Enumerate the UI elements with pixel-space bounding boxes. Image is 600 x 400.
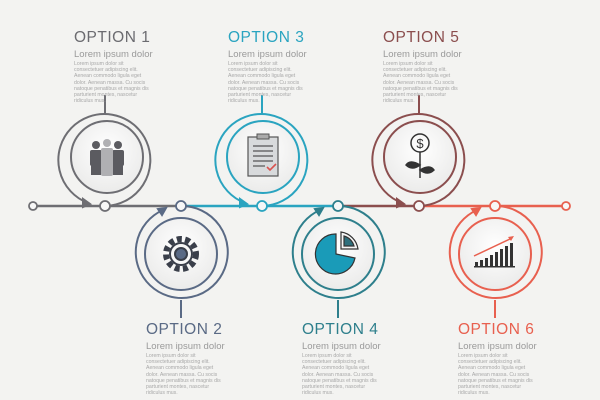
- icon: pie chart: [315, 232, 358, 274]
- text: option 5: Lorem ipsum dolor: [383, 49, 462, 60]
- circle 4: [293, 206, 385, 318]
- circle 3: [215, 95, 307, 207]
- text: option 2: OPTION 2: [146, 321, 222, 338]
- text: option 4: [302, 321, 381, 396]
- text: option 3: Lorem ipsum dolor sit consectetuer adipiscing elit. Aenean commodo ligula eget dolor. Aenean massa. Cu socis natoque penatibus et magnis dis parturient montes, nascetur ridiculus mus.: [228, 61, 303, 104]
- timeline line: [33, 205, 566, 207]
- icon: money plant: [406, 134, 434, 178]
- text: option 2: Lorem ipsum dolor: [146, 341, 225, 352]
- text: option 6: Lorem ipsum dolor: [458, 341, 537, 352]
- icon: gear: [166, 239, 196, 269]
- text: option 5: Lorem ipsum dolor sit consectetuer adipiscing elit. Aenean commodo ligula eget dolor. Aenean massa. Cu socis natoque penatibus et magnis dis parturient montes, nascetur ridiculus mus.: [383, 61, 458, 104]
- circle 2: [136, 206, 228, 318]
- text: option 1: OPTION 1: [74, 29, 150, 46]
- icon: bar chart: [474, 236, 515, 268]
- text: option 1: Lorem ipsum dolor sit consectetuer adipiscing elit. Aenean commodo ligula eget dolor. Aenean massa. Cu socis natoque penatibus et magnis dis parturient montes, nascetur ridiculus mus.: [74, 61, 149, 104]
- text: option 5: OPTION 5: [383, 29, 459, 46]
- text: option 4: Lorem ipsum dolor: [302, 341, 381, 352]
- circle 5: [372, 95, 464, 207]
- text: option 3: OPTION 3: [228, 29, 304, 46]
- icon: people: [90, 139, 124, 176]
- text: option 2: Lorem ipsum dolor sit consectetuer adipiscing elit. Aenean commodo ligula eget dolor. Aenean massa. Cu socis natoque penatibus et magnis dis parturient montes, nascetur ridiculus mus.: [146, 353, 221, 396]
- text: option 1: [74, 29, 153, 104]
- text: option 6: [458, 321, 537, 396]
- text: option 4: Lorem ipsum dolor sit consectetuer adipiscing elit. Aenean commodo ligula eget dolor. Aenean massa. Cu socis natoque penatibus et magnis dis parturient montes, nascetur ridiculus mus.: [302, 353, 377, 396]
- text: option 3: Lorem ipsum dolor: [228, 49, 307, 60]
- text: option 6: Lorem ipsum dolor sit consectetuer adipiscing elit. Aenean commodo ligula eget dolor. Aenean massa. Cu socis natoque penatibus et magnis dis parturient montes, nascetur ridiculus mus.: [458, 353, 533, 396]
- icon: clipboard: [248, 134, 278, 176]
- circle 1: [58, 95, 150, 207]
- icon: money plant: $: [416, 136, 424, 151]
- circle 6: [450, 206, 542, 318]
- text: option 4: OPTION 4: [302, 321, 378, 338]
- timeline nodes: [29, 201, 570, 211]
- text: option 3: [228, 29, 307, 104]
- text: option 2: [146, 321, 225, 396]
- text: option 6: OPTION 6: [458, 321, 534, 338]
- text: option 1: Lorem ipsum dolor: [74, 49, 153, 60]
- text: option 5: [383, 29, 462, 104]
